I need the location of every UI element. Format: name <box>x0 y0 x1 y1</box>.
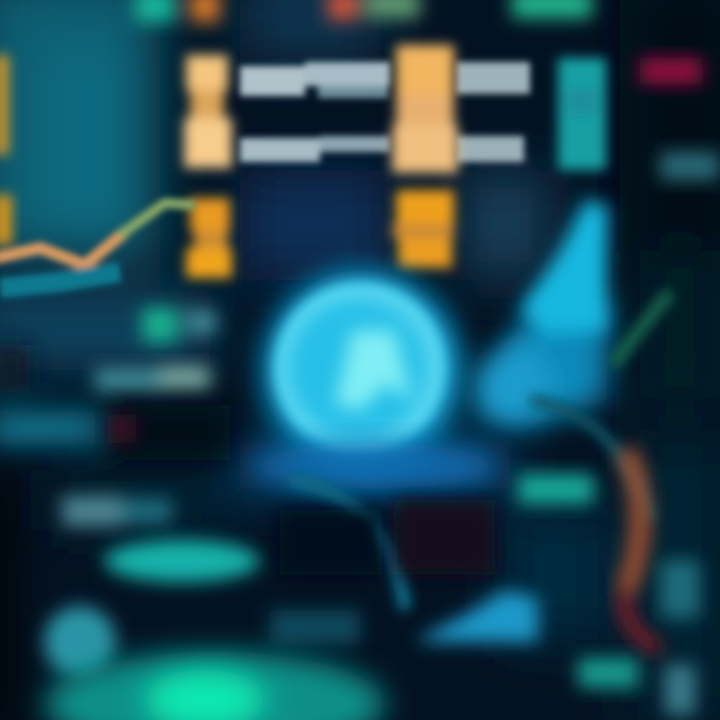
muted bar bottom centre <box>270 610 360 644</box>
icon: glyph <box>335 330 412 410</box>
right side label <box>660 152 720 180</box>
glow base below icon <box>250 444 500 488</box>
mid left label <box>95 366 210 392</box>
teal label lower right <box>578 658 638 688</box>
small chips mid left <box>142 308 216 342</box>
central glowing icon <box>262 270 462 470</box>
left dark panel <box>0 345 230 460</box>
crimson label <box>640 58 702 84</box>
green diagonal line <box>612 292 670 365</box>
table: teal column <box>558 58 606 170</box>
teal label right <box>518 474 594 504</box>
table: left orange column <box>184 55 232 278</box>
top status chips <box>135 0 592 22</box>
dark central panel <box>280 500 495 575</box>
line chart <box>0 203 195 288</box>
circle bottom left <box>44 606 116 678</box>
lower left label <box>62 496 172 526</box>
red orange vertical line <box>624 450 660 650</box>
table: centre orange column <box>392 45 458 268</box>
curved connector <box>290 400 650 610</box>
blue cloud <box>420 590 538 642</box>
cyan area chart <box>475 200 610 425</box>
table: text rows <box>240 62 530 162</box>
left orange axis <box>0 55 12 245</box>
teal pill <box>104 540 260 582</box>
bottom mint mound <box>45 652 385 720</box>
dark red hint <box>108 415 136 443</box>
right lower chips <box>660 560 700 715</box>
